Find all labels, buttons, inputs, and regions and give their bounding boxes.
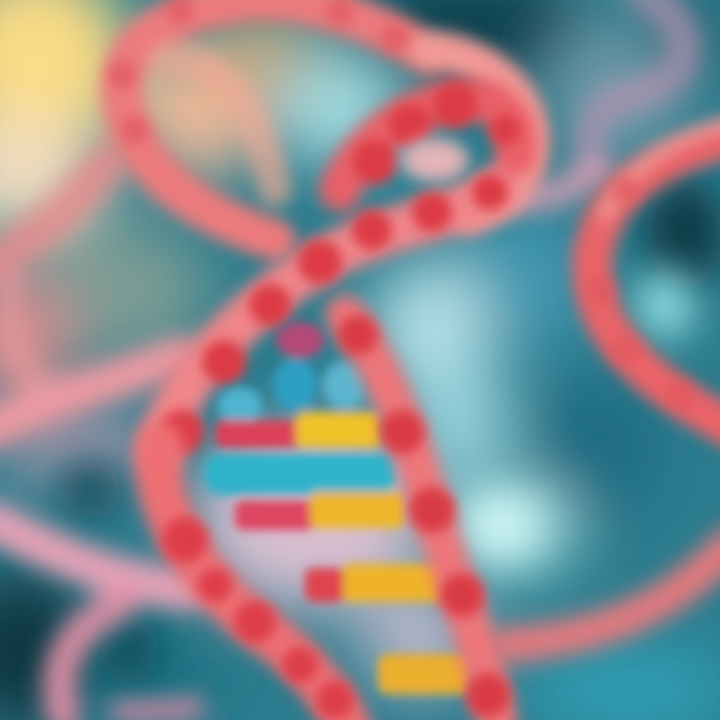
- helix strand: upper left to top right: [160, 83, 520, 454]
- base pairs: coloured rungs: [205, 322, 473, 694]
- pink ribbon: right loop: [592, 122, 720, 430]
- helix strand: right side descending: [338, 315, 510, 720]
- helix window glimpse: [401, 138, 469, 182]
- beads on top and right ribbons: [108, 0, 695, 410]
- pink ribbon: top loop: [122, 0, 530, 240]
- helix strand: lower left descending: [158, 445, 354, 720]
